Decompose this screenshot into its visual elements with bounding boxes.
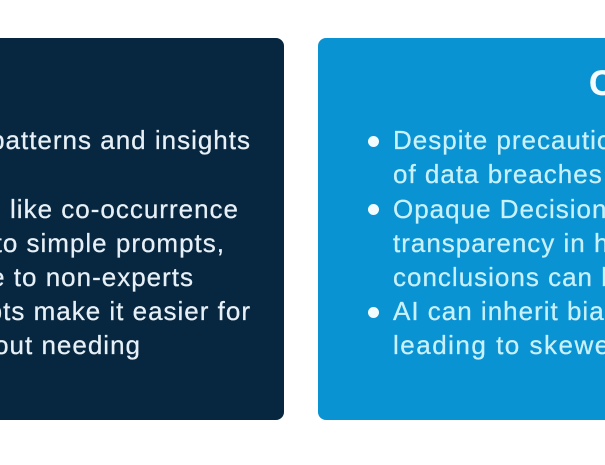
bullet 2: [368, 204, 379, 215]
text: of data breaches: of data breaches: [393, 159, 603, 189]
text: like co-occurrence: like co-occurrence: [10, 194, 239, 224]
bullet 3: [368, 307, 379, 318]
text: to simple prompts: to simple prompts,: [0, 228, 225, 258]
panel: left dark card: [0, 38, 284, 420]
text: opaque decision: Opaque Decision: [393, 194, 605, 224]
panel: right blue card: [318, 38, 605, 420]
bullet 1: [368, 136, 379, 147]
